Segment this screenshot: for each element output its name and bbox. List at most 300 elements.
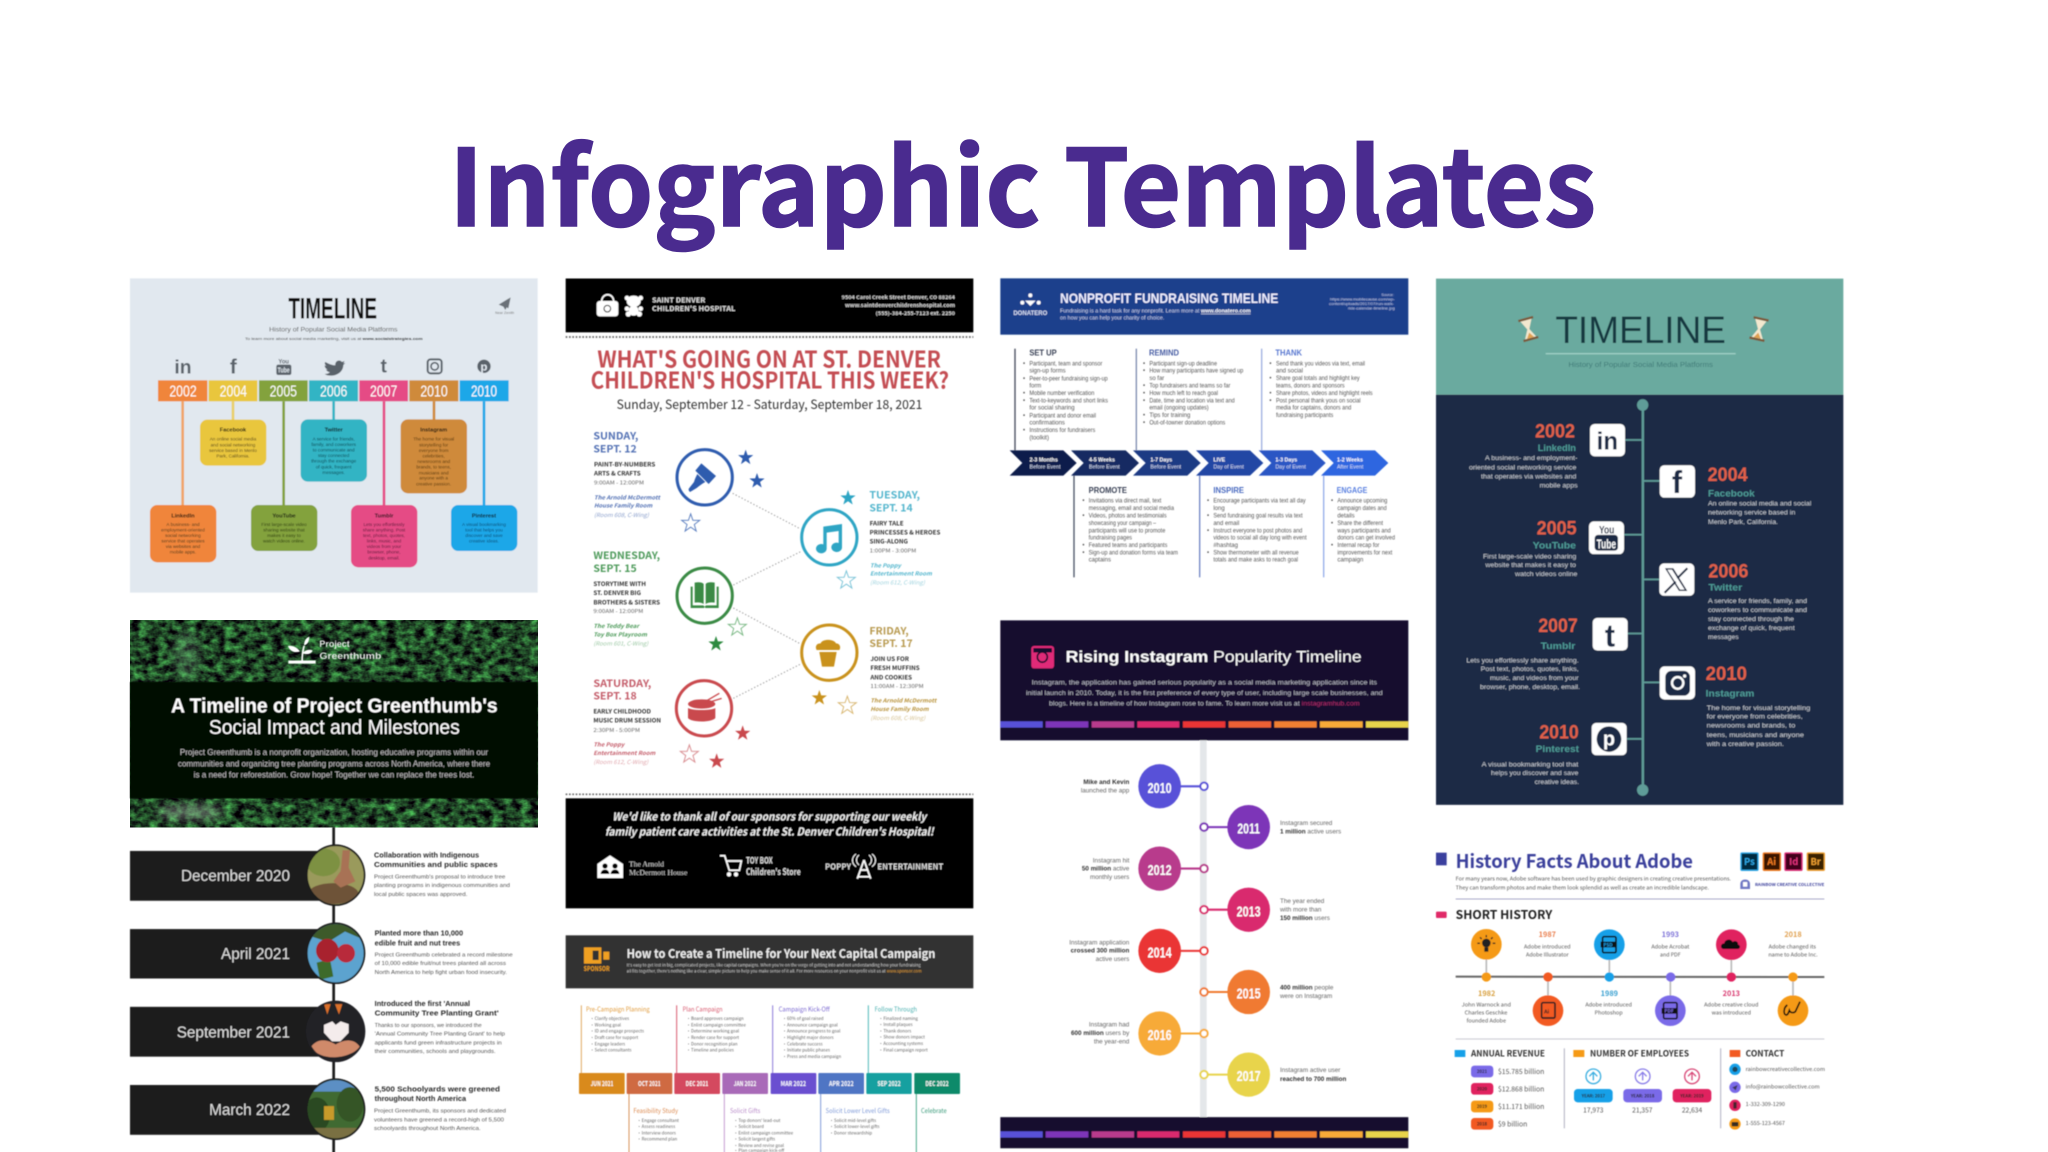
entry: LinkedIn 2002: oriented social networking service bbox=[1469, 464, 1577, 471]
milestone: April 2021: Planted more than 10,000 bbox=[375, 929, 463, 938]
heading: History Facts About Adobe bbox=[1456, 847, 1693, 874]
event: Wednesday Sept. 15: STORYTIME WITH bbox=[593, 579, 646, 588]
step: PROMOTE: Sign-up and donation forms via team bbox=[1089, 550, 1178, 556]
event: Sunday Sept. 12: 9:00AM - 12:00PM bbox=[594, 479, 644, 487]
card: Tumblr: Lets you effortlessly bbox=[363, 522, 405, 527]
header bar: SAINT DENVER bbox=[652, 295, 706, 305]
history timeline: Adobe changed its bbox=[1769, 942, 1817, 950]
entry: Pinterest 2010: helps you discover and save bbox=[1491, 770, 1579, 777]
month bar: APR 2022 bbox=[828, 1078, 854, 1088]
phase: Solicit Lower Level Gifts: Solicit mid-level gifts bbox=[834, 1117, 876, 1124]
event: Wednesday Sept. 15: WEDNESDAY, bbox=[593, 547, 660, 562]
forest banner bbox=[130, 620, 538, 827]
step: INSPIRE: Show thermometer with all revenue bbox=[1213, 550, 1299, 556]
entry: Pinterest 2010: p bbox=[1603, 728, 1615, 751]
phase: Plan Campaign: Timeline and policies bbox=[691, 1047, 734, 1054]
year bar: 2006 bbox=[320, 383, 347, 400]
card: Tumblr bbox=[351, 505, 417, 567]
card: YouTube: YouTube bbox=[272, 513, 296, 519]
step: THANK: Share photos, videos and highlight reels bbox=[1276, 391, 1373, 397]
card: LinkedIn: via websites and bbox=[166, 544, 201, 549]
history timeline: Adobe creative cloud bbox=[1704, 1001, 1758, 1009]
icon: sponsor logo bbox=[584, 947, 610, 973]
card: Instagram: everyone from bbox=[419, 448, 449, 453]
phase: Campaign Kick-Off: Campaign Kick-Off bbox=[779, 1004, 831, 1013]
card: YouTube: makes it easy to bbox=[267, 533, 301, 538]
phase: Campaign Kick-Off: Highlight major donors bbox=[787, 1034, 834, 1041]
phase: Solicit Lower Level Gifts: • bbox=[829, 1118, 834, 1124]
milestone: December 2020: planting programs in indigenous communities and bbox=[374, 883, 510, 889]
history timeline: Adobe introduced bbox=[1524, 942, 1571, 950]
month bar: SEP 2022 bbox=[877, 1078, 901, 1088]
logo text: Greenthumb bbox=[319, 651, 382, 661]
entry: Twitter 2006: stay connected through the bbox=[1708, 616, 1794, 623]
entry: Instagram 2010: 2010 bbox=[1706, 664, 1747, 685]
event: Sunday Sept. 12: SEPT. 12 bbox=[593, 441, 637, 456]
phase: Pre-Campaign Planning: • bbox=[590, 1041, 594, 1047]
step: INSPIRE bbox=[1207, 485, 1307, 564]
step: REMIND: • bbox=[1143, 420, 1145, 426]
entry: LinkedIn 2002: LinkedIn bbox=[1538, 443, 1576, 454]
entry: LinkedIn 2002: in bbox=[1597, 428, 1618, 456]
step: SET UP: Text-to-keywords and short links bbox=[1029, 398, 1108, 404]
phase: Campaign Kick-Off: 60% of goal raised bbox=[787, 1015, 824, 1022]
entry: Twitter 2006 bbox=[1659, 561, 1807, 641]
entry: Pinterest 2010: creative ideas. bbox=[1535, 779, 1579, 786]
phase: Campaign Kick-Off: • bbox=[782, 1048, 787, 1054]
card: Twitter: Twitter bbox=[325, 427, 344, 433]
month bar bbox=[579, 1073, 960, 1094]
milestone: 2013: The year ended bbox=[1280, 898, 1325, 905]
header: on how you can help your charity of choice. bbox=[1060, 316, 1165, 322]
section heading: short history: SHORT HISTORY bbox=[1456, 906, 1553, 923]
campaign header: It's easy to get lost in big, complicated projects, like capital campaigns. When you're on the verge of getting into and not understanding how your fundraising bbox=[627, 963, 921, 969]
phase: Plan Campaign: Enlist campaign committee bbox=[691, 1021, 746, 1028]
phase: Feasibility Study: Assess readiness bbox=[642, 1123, 675, 1130]
header: History of Popular Social Media Platforms bbox=[1568, 361, 1713, 369]
chevron timeline: Before Event bbox=[1030, 465, 1061, 471]
date range: Sunday, September 12 - Saturday, September 18, 2021 bbox=[617, 394, 922, 413]
header bbox=[1436, 279, 1843, 395]
milestone: 2011 bbox=[1200, 805, 1341, 849]
phase: Follow Through: • bbox=[879, 1041, 883, 1047]
phase: Plan Campaign: Board approves campaign bbox=[691, 1015, 744, 1022]
step: REMIND: Top fundraisers and teams so far bbox=[1149, 384, 1230, 390]
phase: Follow Through: Install plaques bbox=[883, 1022, 913, 1028]
icon: shopping cart bbox=[720, 856, 741, 876]
contact: 1-332-309-1290 bbox=[1746, 1100, 1785, 1108]
step: REMIND: How much left to reach goal bbox=[1149, 391, 1218, 397]
step: SET UP: SET UP bbox=[1029, 348, 1057, 358]
heading: For many years now, Adobe software has been used by graphic designers in creating creative presentations. bbox=[1456, 875, 1731, 883]
contact: CONTACT bbox=[1746, 1047, 1784, 1059]
milestone: September 2021: Thanks to our sponsors, we introduced the bbox=[375, 1023, 482, 1029]
event: Tuesday Sept. 14: SEPT. 14 bbox=[869, 499, 913, 514]
stems bbox=[183, 401, 484, 505]
event: Tuesday Sept. 14 bbox=[802, 487, 941, 588]
icon: radio tower bbox=[852, 854, 875, 879]
milestone: September 2021: their communities, schools and playgrounds. bbox=[375, 1049, 496, 1055]
number of employees: NUMBER OF EMPLOYEES bbox=[1590, 1047, 1689, 1059]
step: INSPIRE: • bbox=[1207, 528, 1209, 534]
phase: Feasibility Study: • bbox=[637, 1137, 641, 1143]
event: Saturday Sept. 18: SEPT. 18 bbox=[593, 688, 637, 703]
entry: Twitter 2006: Twitter bbox=[1708, 583, 1743, 594]
card: Twitter: family, and coworkers bbox=[311, 442, 357, 447]
number of employees: 22,634 bbox=[1682, 1104, 1702, 1114]
social icons row: Tube bbox=[278, 366, 290, 375]
number of employees: 21,357 bbox=[1632, 1104, 1653, 1114]
phase: Solicit Gifts: Solicit board bbox=[738, 1123, 764, 1130]
annual revenue: 2019 bbox=[1477, 1104, 1488, 1110]
entry: LinkedIn 2002: A business- and employment- bbox=[1485, 455, 1577, 462]
phase: Campaign Kick-Off: • bbox=[782, 1035, 787, 1041]
panel: sponsors footer and capital campaign timeline bbox=[566, 794, 973, 1152]
entry: Instagram 2010: The home for visual storytelling bbox=[1707, 705, 1811, 712]
entry: Instagram 2010: Instagram bbox=[1706, 688, 1754, 699]
card: Twitter: of quick, frequent bbox=[316, 464, 352, 469]
step: INSPIRE: and email bbox=[1213, 521, 1239, 527]
campaign header: How to Create a Timeline for Your Next Capital Campaign bbox=[627, 945, 935, 962]
event: Sunday Sept. 12: (Room 608, C-Wing) bbox=[594, 510, 650, 519]
step: PROMOTE bbox=[1082, 485, 1178, 564]
event: Friday Sept. 17: The Arnold McDermott bbox=[870, 696, 937, 705]
step: REMIND: Tips for training bbox=[1149, 413, 1190, 419]
date labels bbox=[1478, 929, 1802, 999]
history timeline: John Warnock and bbox=[1462, 1001, 1511, 1009]
step: ENGAGE: Share the different bbox=[1337, 521, 1383, 527]
chevron timeline: Day of Event bbox=[1275, 465, 1306, 471]
entry: Instagram 2010: for everyone from celebrities, bbox=[1707, 714, 1803, 721]
step: THANK: THANK bbox=[1275, 348, 1303, 358]
step: ENGAGE: • bbox=[1331, 543, 1333, 549]
navy body bbox=[1436, 395, 1843, 805]
collective logo bbox=[1740, 879, 1825, 889]
card: Facebook bbox=[200, 420, 266, 466]
step: INSPIRE: Encourage participants via text all day bbox=[1213, 499, 1306, 505]
header: Fundraising is a hard task for any nonprofit. Learn more at www.donatero.com bbox=[1060, 309, 1251, 315]
entry: Instagram 2010: teens, musicians and anyone bbox=[1707, 732, 1804, 739]
step: PROMOTE: PROMOTE bbox=[1089, 485, 1127, 495]
phase: Plan Campaign: • bbox=[686, 1022, 691, 1028]
event: Saturday Sept. 18: The Poppy bbox=[593, 740, 625, 749]
milestone: December 2020: Project Greenthumb's proposal to introduce tree bbox=[374, 874, 505, 880]
entry: Tumblr 2007: Post text, photos, quotes, links, bbox=[1481, 666, 1579, 673]
milestone: 2016: 600 million users by bbox=[1071, 1030, 1130, 1037]
milestone: March 2022: Project Greenthumb, its sponsors and dedicated bbox=[374, 1109, 506, 1115]
event: Tuesday Sept. 14: (Room 612, C-Wing) bbox=[870, 577, 926, 586]
entry: YouTube 2005 bbox=[1483, 518, 1624, 578]
event: Friday Sept. 17: SEPT. 17 bbox=[869, 635, 913, 650]
spine bbox=[1624, 399, 1660, 796]
step: REMIND: How many participants have signed up bbox=[1149, 369, 1244, 375]
card: Instagram: creative passion. bbox=[416, 481, 451, 486]
history timeline bbox=[1456, 929, 1824, 1026]
annual revenue bbox=[1455, 1047, 1545, 1130]
card: Twitter: stay connected bbox=[318, 453, 350, 458]
social icons row: f bbox=[230, 355, 237, 378]
step: PROMOTE: Featured teams and participants bbox=[1089, 543, 1167, 549]
footer bar bbox=[1000, 1117, 1408, 1148]
icon: Donatero logo: DONATERO bbox=[1013, 311, 1048, 317]
milestone: 2013: 150 million users bbox=[1280, 915, 1330, 922]
entry: Pinterest 2010 bbox=[1482, 722, 1627, 786]
step: INSPIRE: Send fundraising goal results via text bbox=[1213, 513, 1303, 519]
card: LinkedIn: mobile apps. bbox=[170, 550, 196, 555]
step: REMIND: • bbox=[1143, 361, 1145, 367]
step: SET UP: (toolkit) bbox=[1029, 435, 1049, 441]
step: INSPIRE: videos to social all day long with event bbox=[1213, 536, 1307, 542]
header: Rising Instagram Popularity Timeline bbox=[1066, 649, 1362, 666]
panel heading: TIMELINE: TIMELINE bbox=[288, 292, 377, 325]
number of employees: 17,973 bbox=[1583, 1104, 1604, 1114]
phase: Feasibility Study: Engage consultant bbox=[642, 1118, 679, 1124]
step: ENGAGE: improvements for next bbox=[1337, 550, 1393, 556]
phase: Feasibility Study: Interview donors bbox=[642, 1129, 676, 1136]
icon: paper plane logo: Near Zenith bbox=[495, 311, 514, 315]
phase: Feasibility Study: Recommend plan bbox=[642, 1136, 678, 1143]
card: YouTube: First large-scale video bbox=[261, 522, 307, 527]
phase: Feasibility Study: • bbox=[637, 1124, 641, 1130]
step: INSPIRE: • bbox=[1207, 550, 1209, 556]
milestone: March 2022: March 2022 bbox=[209, 1102, 290, 1119]
month bar: DEC 2022 bbox=[925, 1078, 949, 1088]
panel: social media timeline on light background bbox=[130, 278, 538, 593]
phase: Solicit Lower Level Gifts: Solicit lower-level gifts bbox=[834, 1123, 880, 1130]
entry: Pinterest 2010: A visual bookmarking tool that bbox=[1482, 761, 1579, 768]
step: SET UP: • bbox=[1023, 413, 1025, 419]
header bar: (555)-384-255-7123 ext. 2250 bbox=[876, 311, 955, 317]
intro text: Project Greenthumb is a nonprofit organization, hosting educative programs within our bbox=[180, 748, 489, 757]
card: YouTube: watch videos online. bbox=[263, 539, 305, 544]
event: Friday Sept. 17: (Room 608, C-Wing) bbox=[870, 713, 926, 722]
step: INSPIRE: #hashtag bbox=[1213, 543, 1238, 549]
card: Instagram: storytelling for bbox=[419, 442, 449, 447]
phase: Campaign Kick-Off: Initiate public phases bbox=[787, 1047, 830, 1054]
heading: Social Impact and Milestones bbox=[209, 717, 460, 739]
card: LinkedIn: service that operates bbox=[161, 539, 205, 544]
milestone: September 2021: September 2021 bbox=[177, 1024, 290, 1041]
entry: Tumblr 2007: Tumblr bbox=[1541, 641, 1576, 652]
chevron timeline: Before Event bbox=[1150, 465, 1182, 471]
phase: Pre-Campaign Planning: ID and engage prospects bbox=[595, 1028, 644, 1035]
phase: Pre-Campaign Planning: • bbox=[590, 1016, 594, 1022]
step: ENGAGE: campaign dates and bbox=[1337, 506, 1387, 512]
icon: house logo bbox=[597, 855, 623, 878]
card: Twitter: A service for friends, bbox=[313, 436, 355, 441]
source line: To learn more about social media marketing, visit us at www.socialstrategies.com bbox=[245, 336, 423, 341]
step: ENGAGE: • bbox=[1331, 499, 1333, 505]
entry: Tumblr 2007: music, and videos from your bbox=[1490, 675, 1580, 682]
card: Instagram: Instagram bbox=[420, 428, 447, 434]
header: ride-calendar-timeline.jpg bbox=[1348, 307, 1395, 311]
month bar: MAR 2022 bbox=[781, 1078, 806, 1088]
card: Tumblr: desktop, email. bbox=[368, 555, 400, 560]
milestone: 2015 bbox=[1200, 970, 1334, 1014]
history timeline: Charles Geschke bbox=[1465, 1009, 1507, 1017]
milestone: April 2021: April 2021 bbox=[221, 946, 290, 963]
phase: Campaign Kick-Off: • bbox=[782, 1029, 787, 1035]
event: Wednesday Sept. 15: The Teddy Bear bbox=[593, 621, 641, 630]
phase: Pre-Campaign Planning: Engage leaders bbox=[595, 1040, 625, 1047]
milestone: March 2022: 5,500 Schoolyards were greened bbox=[375, 1084, 500, 1094]
milestone: 2011: Instagram secured bbox=[1280, 820, 1333, 827]
event: Friday Sept. 17 bbox=[802, 622, 937, 722]
step: PROMOTE: Videos, photos and testimonials bbox=[1089, 513, 1167, 519]
phase: Solicit Gifts: • bbox=[734, 1143, 738, 1149]
event: Saturday Sept. 18: Entertainment Room bbox=[593, 748, 656, 757]
sponsors bar: The Arnold bbox=[629, 860, 665, 868]
icon: Illustrator file bbox=[1533, 995, 1563, 1026]
entry: Facebook 2004: f bbox=[1672, 465, 1683, 500]
entry: Instagram 2010: newsrooms and brands, to bbox=[1707, 723, 1796, 730]
step: REMIND: • bbox=[1143, 384, 1145, 390]
header: initial launch in 2010. Today, it is the first preference of every type of user, including large scale businesses, and bbox=[1026, 690, 1383, 697]
card: Pinterest: Pinterest bbox=[472, 513, 496, 519]
milestone: 2013: with more than bbox=[1279, 906, 1322, 913]
icon: PSD file bbox=[1594, 929, 1625, 960]
phase: Solicit Gifts: • bbox=[734, 1137, 738, 1143]
social icons row: in bbox=[174, 357, 192, 378]
phase: Follow Through bbox=[875, 1004, 928, 1053]
sponsors bar: POPPY bbox=[825, 861, 852, 872]
panel: Project Greenthumb timeline bbox=[130, 620, 538, 1152]
milestone: 2016: 2016 bbox=[1148, 1027, 1172, 1044]
card: Tumblr: links, music, and bbox=[367, 539, 402, 544]
phase: Follow Through: Thank donors bbox=[883, 1027, 911, 1034]
heading: They can transform photos and make them look splendid as well as create an incredible landscape. bbox=[1456, 883, 1709, 891]
step: SET UP: Peer-to-peer fundraising sign-up bbox=[1029, 376, 1108, 382]
date labels: 1993 bbox=[1662, 929, 1679, 940]
date labels: 1989 bbox=[1601, 988, 1618, 999]
event: Saturday Sept. 18: EARLY CHILDHOOD bbox=[593, 707, 651, 716]
entry: Facebook 2004 bbox=[1660, 465, 1812, 526]
phase: Pre-Campaign Planning: Working goal bbox=[595, 1021, 622, 1028]
phase: Follow Through: • bbox=[879, 1047, 883, 1053]
event: Saturday Sept. 18: (Room 612, C-Wing) bbox=[593, 757, 649, 766]
year bar: 2010 bbox=[471, 383, 497, 400]
step: INSPIRE: totals and make asks to reach goal bbox=[1213, 558, 1298, 564]
year bar bbox=[158, 380, 509, 401]
milestone: 2017 bbox=[1200, 1052, 1346, 1097]
card: LinkedIn: social networking bbox=[165, 533, 201, 538]
card: YouTube bbox=[251, 505, 317, 551]
milestone: 2012: 2012 bbox=[1148, 862, 1172, 879]
phase: Follow Through: Final campaign report bbox=[883, 1046, 928, 1053]
date labels: 2013 bbox=[1723, 988, 1740, 999]
step: THANK: • bbox=[1269, 398, 1271, 404]
event: Friday Sept. 17: 11:00AM - 12:30PM bbox=[870, 682, 924, 690]
year bar: 2010 bbox=[420, 383, 448, 400]
event: Friday Sept. 17: JOIN US FOR bbox=[870, 654, 909, 663]
icon: medical bag bbox=[597, 295, 618, 316]
step: ENGAGE: Internal recap for bbox=[1337, 543, 1379, 549]
phase: Feasibility Study: • bbox=[637, 1118, 641, 1124]
number of employees: YEAR: 2017 bbox=[1581, 1093, 1606, 1099]
card: Facebook: Park, California. bbox=[216, 453, 250, 458]
phase: Solicit Lower Level Gifts: Solicit Lower Level Gifts bbox=[826, 1106, 890, 1115]
phase: Campaign Kick-Off: Announce progress to goal bbox=[787, 1029, 841, 1035]
phase: Pre-Campaign Planning: • bbox=[590, 1022, 594, 1028]
phase: Follow Through: • bbox=[879, 1016, 883, 1022]
sponsors bar: McDermott House bbox=[629, 869, 687, 877]
step: SET UP: Instructions for fundraisers bbox=[1029, 428, 1095, 434]
black title band bbox=[130, 682, 538, 798]
header: NONPROFIT FUNDRAISING TIMELINE bbox=[1060, 290, 1278, 306]
milestone: April 2021: Project Greenthumb celebrated a record milestone bbox=[375, 953, 513, 959]
contact: rainbowcreativecollective.com bbox=[1746, 1065, 1825, 1073]
annual revenue: $9 billion bbox=[1498, 1119, 1527, 1129]
step: THANK: Post personal thank yous on social bbox=[1276, 398, 1361, 404]
step: REMIND bbox=[1143, 348, 1244, 426]
phase: Campaign Kick-Off bbox=[779, 1004, 841, 1060]
phase: Campaign Kick-Off: • bbox=[782, 1041, 787, 1047]
entry: LinkedIn 2002: that operates via websites and bbox=[1481, 473, 1577, 480]
chevron timeline: LIVE bbox=[1213, 458, 1226, 464]
header: Source: bbox=[1381, 293, 1394, 297]
milestone: 2014: 2014 bbox=[1148, 944, 1172, 962]
phase: Follow Through: Show donors impact bbox=[883, 1034, 925, 1041]
step: PROMOTE: captains bbox=[1089, 558, 1111, 564]
annual revenue: 2020 bbox=[1477, 1086, 1488, 1092]
annual revenue: 2021 bbox=[1477, 1069, 1488, 1075]
phase: Plan Campaign: Render case for support bbox=[691, 1034, 739, 1041]
event: Sunday Sept. 12: PAINT-BY-NUMBERS bbox=[594, 460, 656, 469]
step: SET UP: Participant, team and sponsor bbox=[1029, 361, 1102, 367]
step: ENGAGE: details bbox=[1337, 513, 1355, 519]
history timeline: and PDF bbox=[1660, 950, 1681, 958]
step: ENGAGE: ways participants and bbox=[1336, 528, 1391, 534]
icon: camera bbox=[1031, 646, 1054, 668]
number of employees: YEAR: 2018 bbox=[1630, 1093, 1655, 1099]
icon: sponsor logo: SPONSOR bbox=[584, 963, 610, 973]
phase: Follow Through: • bbox=[879, 1022, 883, 1028]
icon: hourglass right bbox=[1749, 316, 1769, 342]
icon: paper plane logo bbox=[495, 297, 514, 315]
phase: Follow Through: Accounting systems bbox=[883, 1040, 923, 1047]
step: REMIND: REMIND bbox=[1149, 348, 1179, 358]
icon: Illustrator file: Ai bbox=[1543, 1007, 1550, 1015]
event: Tuesday Sept. 14: SING-ALONG bbox=[870, 537, 908, 546]
card: Pinterest bbox=[451, 505, 517, 551]
event: Wednesday Sept. 15: Toy Box Playroom bbox=[593, 629, 648, 638]
event: Tuesday Sept. 14: 1:00PM - 3:00PM bbox=[870, 547, 916, 555]
card: Tumblr: share anything. Post bbox=[363, 528, 406, 533]
sponsors bar: TOY BOX bbox=[746, 854, 773, 866]
step: REMIND: Participant sign-up deadline bbox=[1149, 361, 1218, 367]
annual revenue: ANNUAL REVENUE bbox=[1470, 1047, 1545, 1059]
phase: Campaign Kick-Off: • bbox=[782, 1016, 787, 1022]
step: PROMOTE: • bbox=[1082, 543, 1084, 549]
chevron timeline: After Event bbox=[1337, 465, 1364, 471]
step: REMIND: • bbox=[1143, 398, 1145, 404]
chevron timeline: 2-3 Months bbox=[1030, 458, 1058, 464]
phase: Plan Campaign bbox=[683, 1004, 746, 1054]
card: Twitter: messages. bbox=[322, 470, 345, 475]
entry: Instagram 2010: with a creative passion. bbox=[1706, 741, 1784, 748]
icon: PDF file: PDF bbox=[1664, 1009, 1674, 1015]
card: Instagram: newsrooms and bbox=[417, 459, 451, 464]
header: Instagram, the application has gained serious popularity as a social media marketing application since its bbox=[1032, 680, 1377, 687]
campaign header: all fits together, there's nothing like a clear, simple picture to help you make sense of it all. For more resources on your nonprofit visit us at www.sponsor.com bbox=[627, 969, 922, 975]
milestone: December 2020 bbox=[130, 844, 510, 906]
card: Twitter: to communicate and bbox=[313, 448, 355, 453]
phase: Plan Campaign: Donor recognition plan bbox=[691, 1040, 738, 1047]
step: THANK: • bbox=[1269, 376, 1271, 382]
phase: Celebrate: Celebrate bbox=[921, 1106, 947, 1115]
subtitle: History of Popular Social Media Platforms bbox=[269, 327, 398, 333]
step: SET UP bbox=[1023, 348, 1108, 441]
